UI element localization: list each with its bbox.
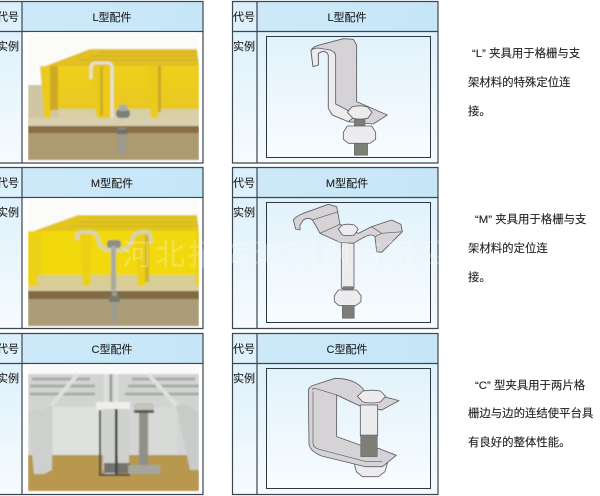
panel: M fitting description: 架材料的定位连 bbox=[468, 241, 548, 255]
label: example: 实例 bbox=[233, 371, 255, 385]
panel: C fitting description: 有良好的整体性能。 bbox=[468, 435, 571, 449]
icon: L clip drawing bbox=[311, 39, 387, 155]
label: code: 代号 bbox=[233, 342, 255, 356]
panel: M fitting photo table bbox=[0, 168, 203, 328]
panel: L fitting description bbox=[468, 46, 580, 118]
panel: L fitting description: 接。 bbox=[468, 105, 491, 118]
panel: M fitting description bbox=[468, 212, 586, 284]
panel: L fitting description: 架材料的特殊定位连 bbox=[468, 75, 571, 89]
panel: L fitting drawing table bbox=[232, 2, 438, 163]
heading: L fitting: L型配件 bbox=[327, 10, 367, 24]
heading: C fitting: C型配件 bbox=[327, 342, 367, 356]
heading: M fitting: M型配件 bbox=[326, 176, 368, 190]
panel: C fitting description: 栅边与边的连结使平台具 bbox=[468, 406, 593, 420]
panel: M fitting description: “M” 夹具用于格栅与支 bbox=[475, 212, 586, 226]
icon: M clip drawing bbox=[293, 204, 402, 318]
panel: M fitting description: 接。 bbox=[468, 271, 491, 284]
photo: L clip on yellow grating bbox=[28, 32, 199, 160]
heading: C fitting: C型配件 bbox=[92, 342, 132, 356]
label: example: 实例 bbox=[233, 39, 255, 53]
photo: M clip on yellow grating bbox=[28, 198, 199, 326]
photo: C clip joining grey grating bbox=[28, 364, 199, 491]
drawing frame bbox=[266, 202, 430, 322]
label: code: 代号 bbox=[233, 176, 255, 190]
drawing frame bbox=[266, 36, 430, 158]
label: code: 代号 bbox=[233, 10, 255, 24]
panel: L fitting photo table bbox=[0, 2, 203, 163]
panel: C fitting description bbox=[468, 378, 593, 449]
panel: C fitting description: “C” 型夹具用于两片格 bbox=[475, 378, 586, 392]
panel: L fitting description: “L” 夹具用于格栅与支 bbox=[472, 46, 580, 60]
heading: L fitting: L型配件 bbox=[92, 10, 132, 24]
icon: C clip drawing bbox=[308, 378, 399, 477]
watermark: 河北拓海玻璃钢有限公司 bbox=[122, 239, 485, 272]
panel: C fitting drawing table bbox=[232, 334, 438, 494]
label: example: 实例 bbox=[233, 205, 255, 219]
panel: M fitting drawing table bbox=[232, 168, 438, 328]
drawing frame bbox=[266, 368, 430, 488]
heading: M fitting: M型配件 bbox=[91, 176, 133, 190]
panel: C fitting photo table bbox=[0, 334, 203, 494]
